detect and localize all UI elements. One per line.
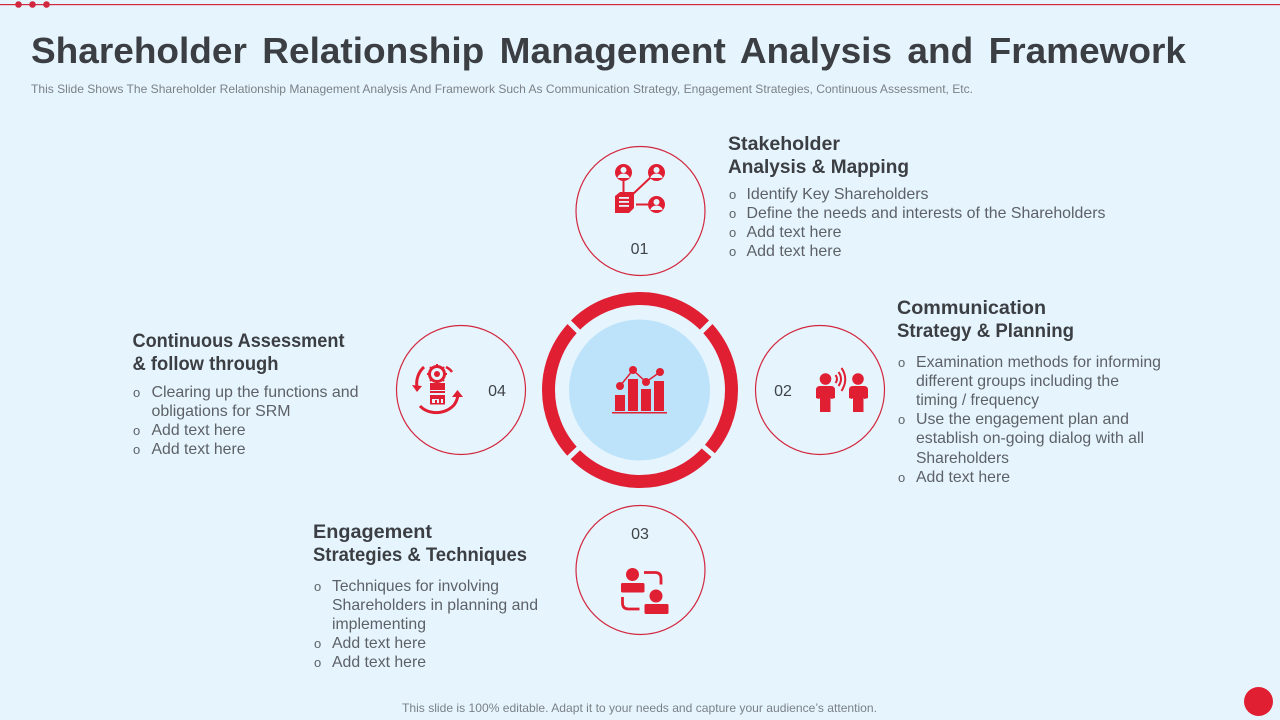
panel: node 04 [396,326,526,454]
node 02 circle [756,326,884,454]
bullet list: establish on-going dialog with all [916,430,1144,447]
bullet list: o [729,187,736,202]
bullet list: o [898,355,905,370]
bullet list [314,578,538,671]
bullet list: o [898,470,905,485]
heading: Analysis & Mapping [728,157,909,178]
text: engagement strategies and techniques [313,522,538,671]
node 03 circle [576,506,705,634]
bullet list: timing / frequency [916,392,1039,409]
node 04 number: 04 [488,383,506,400]
heading: Continuous Assessment [132,331,345,352]
panel: node 03 [576,506,705,634]
panel: node 02 [756,326,884,454]
bullet list: Define the needs and interests of the Shareholders [746,205,1106,222]
bullet list: o [729,225,736,240]
bullet list: o [133,423,140,438]
bullet list [729,186,1106,260]
text: continuous assessment and follow through [132,331,358,458]
heading [132,331,345,375]
central light blue disc [569,320,710,460]
bullet list: Add text here [332,635,426,652]
node 01 number: 01 [631,241,648,258]
icon: two people talking [816,368,868,412]
heading: & follow through [132,354,278,375]
top rule with three dots [0,1,1280,8]
icon: assessment cycle [412,364,463,413]
icon: bar chart with trend line [612,366,667,414]
bullet list: o [729,206,736,221]
node 03 number: 03 [631,526,649,543]
bullet list: Add text here [152,422,246,439]
icon: people exchange [621,568,668,614]
heading: Communication [897,298,1046,319]
bullet list: Shareholders in planning and [332,597,538,614]
text: stakeholder analysis and mapping [728,134,1106,260]
bullet list: Use the engagement plan and [916,411,1129,428]
bullet list: Add text here [746,243,842,260]
bullet list: o [133,385,140,400]
node 01 circle [576,146,705,276]
bullet list: o [314,655,321,670]
bullet list: Clearing up the functions and [152,384,358,401]
bullet list: o [729,244,736,259]
bullet list: obligations for SRM [152,403,290,420]
bullet list: Add text here [152,441,246,458]
heading: Strategy & Planning [897,321,1074,342]
bullet list: Add text here [916,469,1010,486]
icon: stakeholder mapping [615,164,665,213]
node 02 number: 02 [774,383,792,400]
heading [897,298,1074,342]
bullet list: Shareholders [916,450,1009,467]
bullet list: different groups including the [916,373,1119,390]
heading [728,134,909,178]
heading: Strategies & Techniques [313,545,527,566]
bullet list: o [898,412,905,427]
bullet list [898,354,1161,486]
bullet list: implementing [332,616,426,633]
bullet list: o [314,636,321,651]
text: communication strategy and planning [897,298,1161,486]
bullet list: o [133,442,140,457]
heading: Engagement [313,522,433,543]
node 04 circle [396,326,526,454]
title: Shareholder Relationship Management Analysis and Framework [31,30,1187,71]
corner dot [1244,687,1273,716]
bullet list: Add text here [332,654,426,671]
bullet list: o [314,579,321,594]
panel: node 01 [576,146,705,276]
footer note: This slide is 100% editable. Adapt it to your needs and capture your audience’s attention. [402,701,877,715]
bullet list [133,384,358,458]
bullet list: Techniques for involving [332,578,499,595]
bullet list: Add text here [746,224,842,241]
heading: Stakeholder [728,134,841,155]
subtitle: This Slide Shows The Shareholder Relationship Management Analysis And Framework Such As Communication Strategy, Engagement Strategies, Continuous Assessment, Etc. [31,82,973,96]
heading [313,522,527,566]
bullet list: Examination methods for informing [916,354,1161,371]
central ring [548,298,732,482]
bullet list: Identify Key Shareholders [746,186,928,203]
